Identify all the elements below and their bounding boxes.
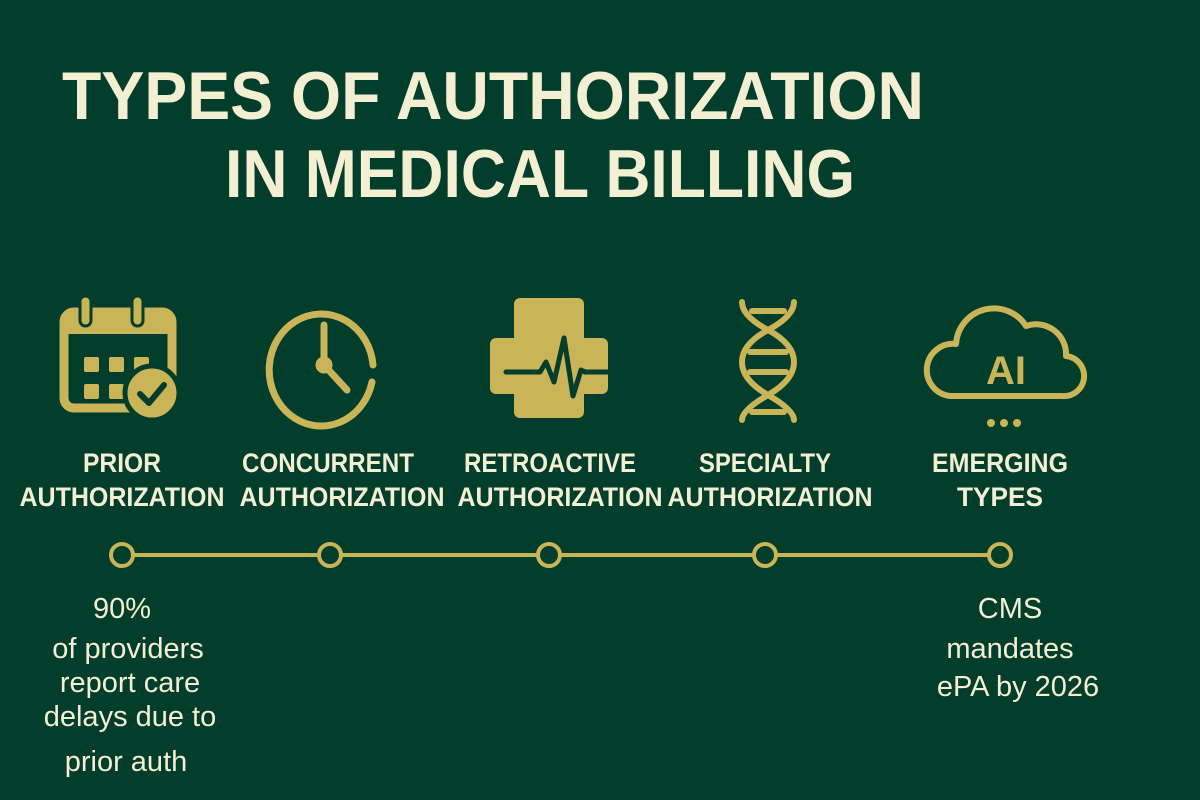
category labels: CONCURRENT <box>242 448 414 478</box>
category labels: AUTHORIZATION <box>240 482 444 512</box>
icon: AI cloud <box>927 308 1084 427</box>
stat: prior auth delays: report care <box>60 667 200 699</box>
category labels: PRIOR <box>83 448 161 478</box>
category labels: TYPES <box>957 482 1043 512</box>
timeline <box>111 544 1011 566</box>
title: IN MEDICAL BILLING <box>225 136 855 212</box>
title <box>62 58 924 212</box>
category labels: SPECIALTY <box>699 448 831 478</box>
stat: CMS mandate <box>937 593 1099 703</box>
stat: CMS mandate: ePA by 2026 <box>937 671 1099 703</box>
icon: medical cross with pulse <box>490 298 623 418</box>
stat: prior auth delays: delays due to <box>44 701 216 733</box>
icon: DNA <box>742 302 794 420</box>
category labels: AUTHORIZATION <box>20 482 224 512</box>
category labels: RETROACTIVE <box>464 448 636 478</box>
icon: clock <box>269 314 373 426</box>
category labels: AUTHORIZATION <box>458 482 662 512</box>
stat: prior auth delays: 90% <box>93 593 151 625</box>
category labels <box>20 448 1068 512</box>
category labels: EMERGING <box>932 448 1068 478</box>
title: TYPES OF AUTHORIZATION <box>62 58 924 134</box>
stat: CMS mandate: mandates <box>946 633 1074 665</box>
icon: AI cloud: AI <box>986 349 1026 393</box>
stat: prior auth delays: of providers <box>52 633 204 665</box>
stat: CMS mandate: CMS <box>978 593 1042 625</box>
stat: prior auth delays: prior auth <box>65 746 187 778</box>
stat: prior auth delays <box>44 593 216 778</box>
category labels: AUTHORIZATION <box>668 482 872 512</box>
icon: calendar <box>62 296 179 420</box>
